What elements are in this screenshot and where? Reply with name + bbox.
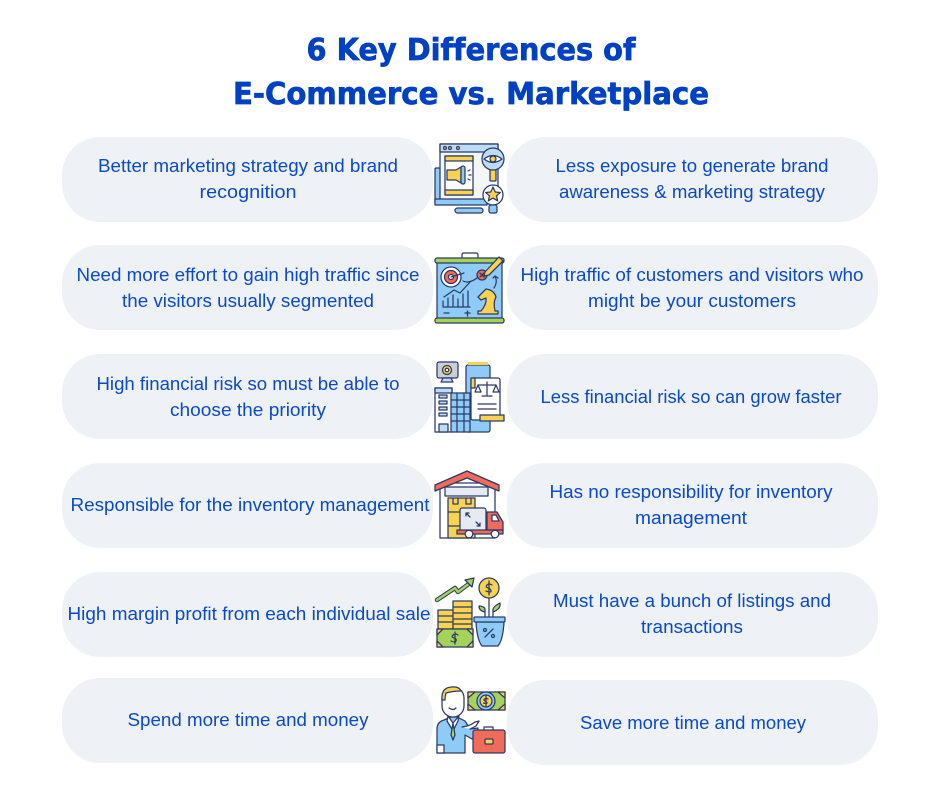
- title: E-Commerce vs. Marketplace: [233, 77, 709, 112]
- row 1 left: marketing: [62, 137, 433, 222]
- row 1 right: marketing: Less exposure to generate brand: [556, 156, 828, 176]
- row 6 right: time and money: Save more time and money: [580, 713, 806, 733]
- row 6 right: time and money: [507, 680, 878, 765]
- row 4 left: inventory: Responsible for the inventory management: [70, 495, 430, 515]
- row 4 right: inventory: [507, 463, 878, 548]
- row 3 left: financial risk: choose the priority: [170, 400, 326, 420]
- row 4 left: inventory: [62, 463, 433, 548]
- row 6 left: time and money: Spend more time and money: [128, 710, 368, 730]
- row 1 right: marketing: awareness & marketing strategy: [559, 182, 825, 202]
- row 3 right: financial risk: Less financial risk so can grow faster: [540, 387, 842, 407]
- icon: businessman with briefcase: [437, 687, 505, 753]
- row 2 left: traffic: Need more effort to gain high traffic since: [76, 265, 420, 285]
- title: [233, 33, 709, 112]
- row 3 right: financial risk: [507, 354, 878, 439]
- icon: corporate building and law document: [435, 362, 504, 432]
- row 2 right: traffic: might be your customers: [588, 291, 796, 311]
- icon: profit money and plant: [437, 578, 505, 647]
- row 5 left: margin: [62, 572, 433, 657]
- row 2 left: traffic: the visitors usually segmented: [122, 291, 374, 311]
- row 2 right: traffic: High traffic of customers and visitors who: [520, 265, 864, 285]
- row 5 right: listings: Must have a bunch of listings and: [553, 591, 831, 611]
- row 3 left: financial risk: High financial risk so must be able to: [96, 374, 400, 394]
- icon: marketing monitor: [435, 144, 504, 213]
- row 1 left: marketing: Better marketing strategy and brand: [98, 156, 398, 176]
- row 4 right: inventory: Has no responsibility for inventory: [550, 482, 832, 502]
- row 4 right: inventory: management: [635, 508, 747, 528]
- row 1 left: marketing: recognition: [200, 182, 296, 202]
- row 5 right: listings: transactions: [641, 617, 743, 637]
- row 1 right: marketing: [507, 137, 878, 222]
- icon: warehouse and truck: [435, 471, 503, 538]
- row 3 left: financial risk: [62, 354, 433, 439]
- row 6 left: time and money: [62, 678, 433, 763]
- row 2 right: traffic: [507, 245, 878, 330]
- icon: strategy board: [435, 253, 504, 323]
- row 5 left: margin: High margin profit from each individual sale: [68, 604, 431, 624]
- row 2 left: traffic: [62, 245, 433, 330]
- row 5 right: listings: [507, 572, 878, 657]
- title: 6 Key Differences of: [306, 33, 636, 68]
